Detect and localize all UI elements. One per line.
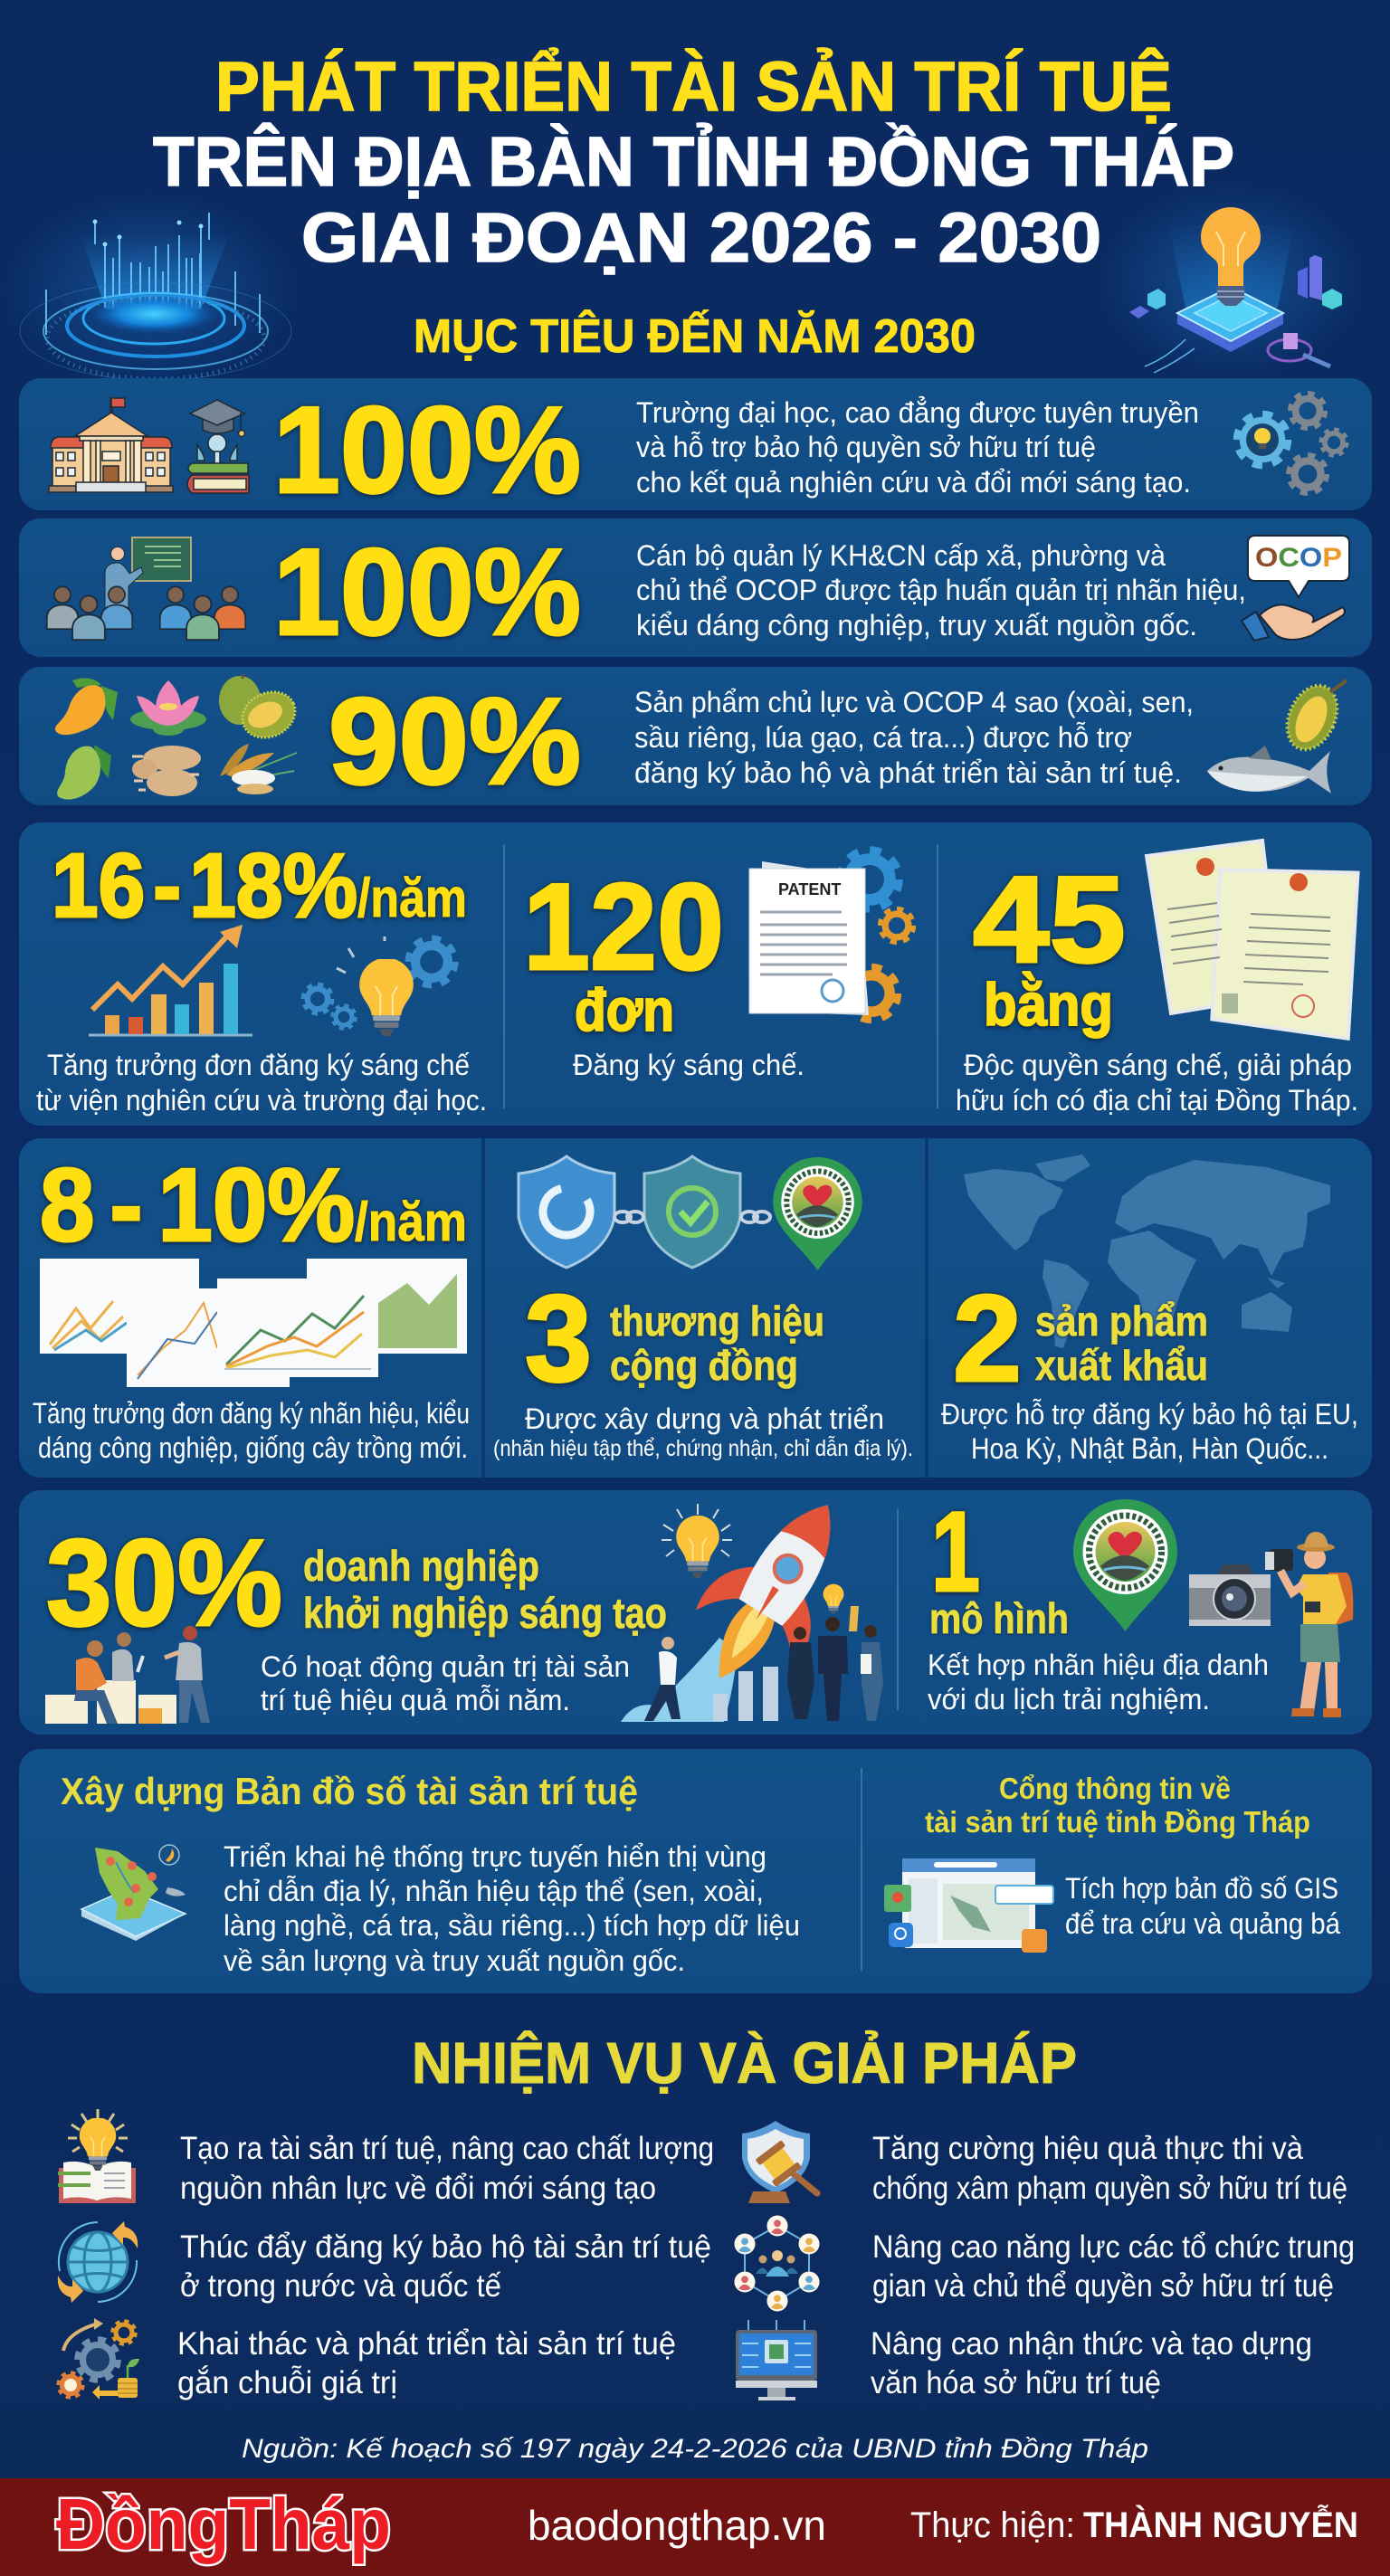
chart cards [40,1259,467,1387]
icon: patent certificates [1147,841,1361,1041]
value: 3 community brands [525,1269,824,1407]
value: 90 percent: 90% [328,672,581,810]
text: trademarks growth description: dáng công nghiệp, giống cây trồng mới. [38,1431,468,1464]
icon: gears and coins [58,2318,139,2400]
text: community brands description [493,1402,913,1461]
panel: trademarks [19,1138,1372,1478]
text: promote registration [180,2229,711,2304]
text: intermediary organisations: Nâng cao năng lực các tổ chức trung [872,2229,1355,2265]
icon: bulb on book [58,2109,136,2203]
text: startups description: trí tuệ hiệu quả mỗi năm. [261,1683,570,1716]
text: digital map description: chỉ dẫn địa lý, nhãn hiệu tập thể (sen, xoài, [224,1874,764,1907]
illustration: office team [45,1626,210,1724]
icon: light bulb with rays [662,1504,732,1578]
heading: information portal: Cổng thông tin về [999,1772,1231,1805]
text: portal description: để tra cứu và quảng bá [1065,1907,1341,1940]
illustration: holographic data platform [0,190,299,389]
value: 1 model [929,1489,1069,1642]
value: 16-18 percent per year: 16 - 18% [52,835,357,936]
value: 30 percent startups: 30% [46,1514,282,1651]
text: enforcement [872,2131,1347,2206]
value: 3 community brands: 3 [525,1269,592,1407]
icon: graduation cap and books [187,400,249,493]
icon: gears with bulb [1237,394,1347,493]
text: managers description: kiểu dáng công nghiệp, truy xuất nguồn gốc. [636,609,1197,642]
heading: objectives: MỤC TIÊU ĐẾN NĂM 2030 [414,309,976,363]
text: tourism description: với du lịch trải nghiệm. [928,1683,1210,1716]
title [153,47,1234,277]
text: products description: Sản phẩm chủ lực và OCOP 4 sao (xoài, sen, [634,686,1194,718]
text: patent applications description: Đăng ký sáng chế. [573,1049,804,1081]
value: 120 applications: 120 [523,858,724,995]
icon: teacher and students [47,537,245,640]
icon: rice stalks [220,744,297,794]
panel: 100% managers [19,518,1372,661]
icon: growth chart [89,925,252,1035]
value: 100 percent: 100% [273,381,581,518]
text: raise awareness: văn hóa sở hữu trí tuệ [871,2365,1161,2400]
text: universities description [636,395,1199,499]
text: export products description: Hoa Kỳ, Nhật Bản, Hàn Quốc... [971,1432,1328,1465]
icon: patent documents with gears: PATENT [778,880,841,898]
value: 45 patents: bằng [984,971,1113,1038]
icon: web portal [884,1858,1053,1953]
source note: Nguồn: Kế hoạch số 197 ngày 24-2-2026 của UBND tỉnh Đồng Tháp [242,2434,1148,2464]
text: portal description [1065,1872,1341,1940]
value: 45 patents [973,851,1126,1038]
title line 3: GIAI ĐOẠN 2026 - 2030 [301,199,1101,277]
value: 2 export products: 2 [953,1269,1022,1407]
icon: green mango [57,745,111,800]
panel: startups and tourism [19,1474,1372,1735]
credit: THÀNH NGUYỄN [1083,2504,1358,2545]
icon: rice grains pile [132,746,201,796]
illustration: world map [964,1155,1330,1348]
illustration: light bulb on chip [1095,181,1366,380]
value: 1 model: mô hình [929,1594,1069,1642]
text: managers description: chủ thể OCOP được tập huấn quản trị nhãn hiệu, [636,574,1246,606]
text: patents description [956,1049,1358,1117]
text: exploit IP: gắn chuỗi giá trị [177,2365,397,2400]
heading: tasks and solutions: NHIỆM VỤ VÀ GIẢI PHÁP [412,2029,1077,2096]
value: 2 export products: sản phẩm [1035,1298,1208,1345]
icon: patent documents with gears [749,851,913,1020]
credit [910,2504,1358,2545]
text: export products description [941,1397,1358,1465]
text: trademarks growth description [33,1397,470,1464]
value: 16-18 percent per year: /năm [357,868,467,928]
heading: digital map: Xây dựng Bản đồ số tài sản trí tuệ [61,1770,638,1812]
value: 2 export products [953,1269,1208,1407]
value: 100 percent: 100% [273,523,581,661]
panel: patents [19,822,1372,1126]
credit: Thực hiện: [910,2505,1075,2545]
icon: people network [734,2215,820,2312]
website: baodongthap.vn [528,2502,826,2549]
heading: information portal [925,1772,1310,1839]
text: startups description [261,1650,630,1716]
icon: OCOP badge on hand: OCOP [1255,543,1342,573]
panel: digital map [19,1749,1372,1993]
text: promote registration: ở trong nước và quốc tế [180,2268,501,2304]
text: digital map description: về sản lượng và truy xuất nguồn gốc. [224,1944,685,1977]
text: intermediary organisations [872,2229,1355,2304]
text: managers description [636,539,1246,642]
icon: OCOP badge on hand [1242,536,1349,641]
value: 3 community brands: cộng đồng [610,1342,798,1389]
panel: 90% products [19,667,1372,810]
text: products description [634,686,1194,789]
text: portal description: Tích hợp bản đồ số GIS [1065,1872,1338,1905]
task list [58,2109,1355,2400]
text: create IP: Tạo ra tài sản trí tuệ, nâng cao chất lượng [180,2131,714,2166]
icon: yellow mango [55,678,118,735]
icon: map on tablet [81,1845,186,1941]
illustration: rocket and business people [621,1474,883,1722]
text: promote registration: Thúc đẩy đăng ký bảo hộ tài sản trí tuệ [180,2229,711,2265]
icon: bulb with gears [303,936,455,1036]
text: create IP: nguồn nhân lực về đổi mới sáng tạo [180,2171,656,2206]
text: universities description: cho kết quả nghiên cứu và đổi mới sáng tạo. [636,466,1191,499]
text: enforcement: Tăng cường hiệu quả thực thi và [872,2131,1303,2166]
icon: globe with arrows [58,2221,138,2303]
text: community brands description: (nhãn hiệu tập thể, chứng nhận, chỉ dẫn địa lý). [493,1435,913,1461]
text: patent growth description [36,1049,487,1117]
icon: lotus [130,680,206,736]
text: raise awareness [871,2326,1312,2400]
text: products description: sầu riêng, lúa gạo, cá tra...) được hỗ trợ [634,720,1132,754]
icon: shields and chain [519,1156,862,1270]
text: digital map description: làng nghề, cá tra, sầu riêng...) tích hợp dữ liệu [224,1909,800,1942]
text: patents description: Độc quyền sáng chế, giải pháp [964,1049,1352,1081]
footer band [0,2478,1390,2576]
text: community brands description: Được xây dựng và phát triển [525,1402,884,1435]
icon: camera [1189,1564,1271,1626]
illustration: tourist [1265,1532,1353,1717]
title line 2: TRÊN ĐỊA BÀN TỈNH ĐỒNG THÁP [153,122,1234,201]
text: patent growth description: từ viện nghiên cứu và trường đại học. [36,1084,487,1117]
heading: information portal: tài sản trí tuệ tỉnh Đồng Tháp [925,1805,1310,1839]
text: exploit IP: Khai thác và phát triển tài sản trí tuệ [177,2326,676,2362]
text: tourism description: Kết hợp nhãn hiệu địa danh [928,1649,1269,1681]
icon: pangasius fish [1207,746,1331,794]
text: trademarks growth description: Tăng trưởng đơn đăng ký nhãn hiệu, kiểu [33,1397,470,1430]
text: digital map description: Triển khai hệ thống trực tuyến hiển thị vùng [224,1840,766,1873]
text: patents description: hữu ích có địa chỉ tại Đồng Tháp. [956,1084,1358,1117]
text: universities description: và hỗ trợ bảo hộ quyền sở hữu trí tuệ [636,430,1096,463]
value: 1 model: 1 [931,1489,980,1615]
text: patent growth description: Tăng trưởng đơn đăng ký sáng chế [47,1049,470,1081]
text: managers description: Cán bộ quản lý KH&CN cấp xã, phường và [636,539,1166,572]
title line 1: PHÁT TRIỂN TÀI SẢN TRÍ TUỆ [215,47,1172,126]
text: products description: đăng ký bảo hộ và phát triển tài sản trí tuệ. [634,756,1182,789]
text: create IP [180,2131,714,2206]
text: digital map description [224,1840,800,1977]
text: exploit IP [177,2326,676,2400]
value: 120 applications: đơn [575,976,674,1043]
logo: Dong Thap: ĐồngTháp [56,2484,391,2564]
value: 8-10 percent per year: 8 - 10% [40,1148,355,1263]
icon: school building [49,398,173,492]
text: startups description: Có hoạt động quản trị tài sản [261,1650,630,1683]
text: intermediary organisations: gian và chủ thể quyền sở hữu trí tuệ [872,2268,1334,2304]
panel: 100% universities [19,378,1372,518]
icon: durian pair [219,674,302,746]
value: 3 community brands: thương hiệu [610,1298,824,1345]
text: universities description: Trường đại học, cao đẳng được tuyên truyền [636,395,1199,429]
value: 8-10 percent per year: /năm [355,1192,467,1252]
icon: location seal [1073,1499,1177,1631]
icon: computer monitor [736,2320,817,2400]
text: raise awareness: Nâng cao nhận thức và tạo dựng [871,2326,1312,2362]
value: 45 patents: 45 [973,851,1126,988]
icon: durian [1278,678,1347,757]
value: 2 export products: xuất khẩu [1035,1342,1208,1389]
value: 30 percent startups [46,1514,667,1651]
value: 30 percent startups: khởi nghiệp sáng tạo [303,1589,667,1637]
value: 30 percent startups: doanh nghiệp [303,1542,539,1590]
icon: shield with gavel [742,2121,817,2203]
text: tourism description [928,1649,1269,1716]
